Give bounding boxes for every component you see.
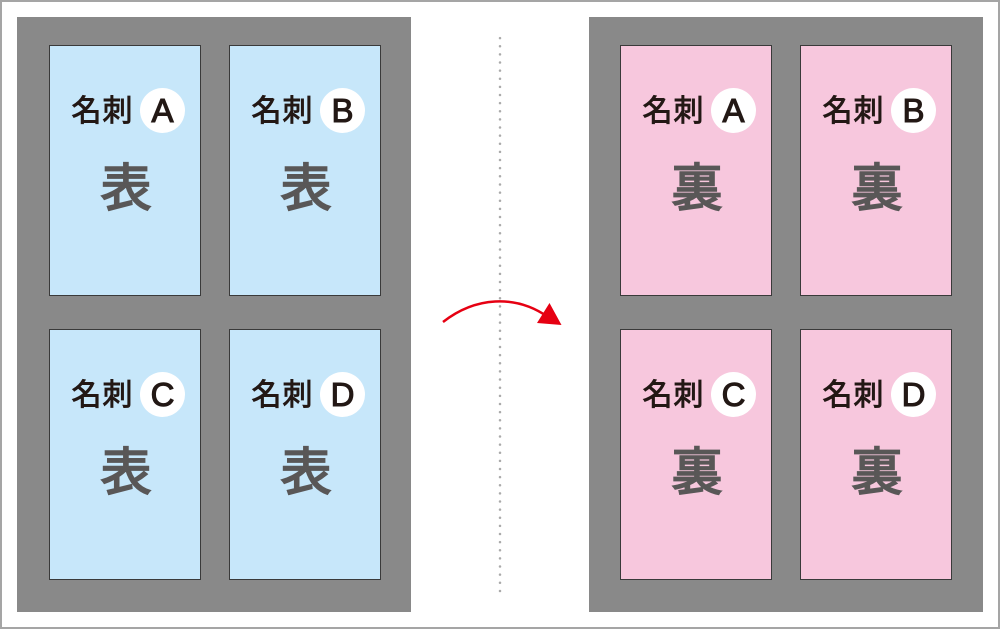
panel: back side sheet [588, 16, 983, 612]
card D back: 裏 [851, 444, 902, 501]
card C back: 裏 [671, 444, 722, 501]
card D front: 名刺 [252, 379, 314, 412]
card D front: 表 [280, 444, 332, 501]
card B back: 名刺 [822, 95, 884, 128]
card A back: A [722, 92, 744, 129]
card D front: D [331, 376, 354, 413]
card A back: 裏 [671, 160, 722, 217]
card D back: 名刺 [822, 379, 884, 412]
card C back: 名刺 [642, 379, 704, 412]
card B back: B [902, 92, 924, 129]
card A front: 名刺 [72, 95, 134, 128]
card B back [800, 45, 952, 296]
card D back [800, 329, 952, 580]
card B front [229, 45, 381, 296]
card D front [229, 329, 381, 580]
card B front: 名刺 [252, 95, 314, 128]
panel: front side sheet [16, 16, 411, 612]
card A front: A [151, 92, 174, 129]
card A back: 名刺 [642, 95, 704, 128]
card B front: 表 [280, 160, 332, 217]
card C back: C [722, 376, 745, 413]
card C front: 表 [100, 444, 152, 501]
card C front [49, 329, 201, 580]
card C back [620, 329, 772, 580]
card B front: B [331, 92, 354, 129]
card A front [49, 45, 201, 296]
card C front: C [151, 376, 174, 413]
card B back: 裏 [851, 160, 902, 217]
card A front: 表 [100, 160, 152, 217]
card D back: D [902, 376, 925, 413]
card A back [620, 45, 772, 296]
card C front: 名刺 [72, 379, 134, 412]
